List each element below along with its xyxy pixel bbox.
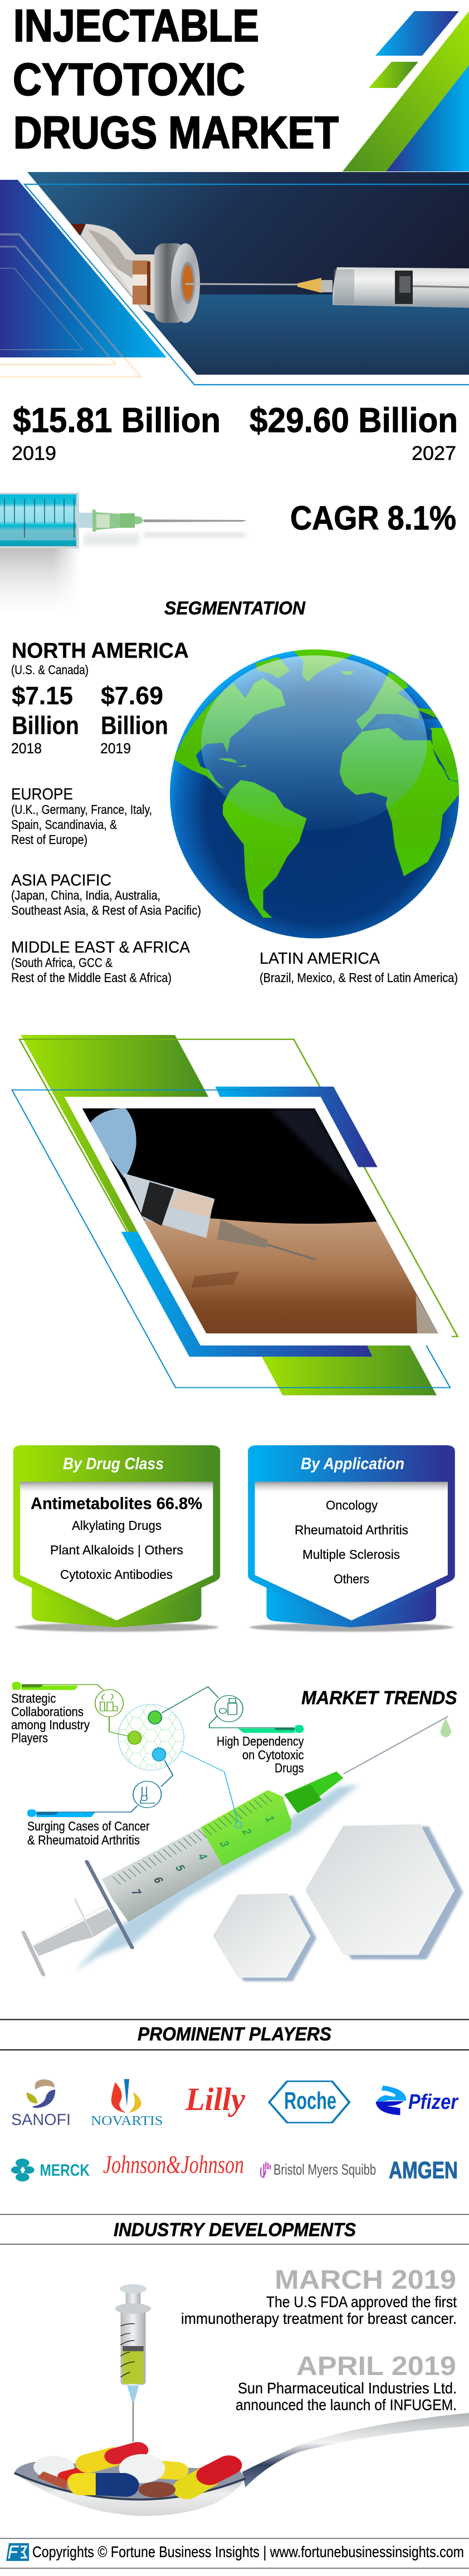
Middle East and Africa block: MIDDLE EAST & AFRICA (11, 939, 190, 956)
big syringe: 6 (150, 1876, 166, 1885)
big syringe: 4 (194, 1852, 210, 1861)
development: March 2019 (181, 2265, 457, 2327)
market value 2027 (250, 401, 458, 464)
market value 2019 (12, 401, 221, 464)
trend: surging cases: Surging Cases of Cancer (27, 1819, 150, 1833)
heading: market trends: MARKET TRENDS (301, 1687, 457, 1709)
Europe block: (U.K., Germany, France, Italy, (11, 802, 152, 817)
syringe (185, 267, 469, 308)
Asia Pacific block: (Japan, China, India, Australia, (11, 888, 160, 902)
logo mark: merck (11, 2158, 35, 2181)
icon: factory (95, 1690, 123, 1717)
icon: fortune business insights logo (6, 2543, 29, 2561)
Europe block: EUROPE (11, 786, 73, 803)
footer (0, 2539, 469, 2568)
trend: surging cases (27, 1819, 150, 1847)
Middle East and Africa block (11, 939, 190, 985)
tag: green (12, 1682, 79, 1690)
Asia Pacific block: ASIA PACIFIC (11, 872, 111, 890)
trend: surging cases: & Rheumatoid Arthritis (27, 1833, 140, 1847)
logo mark: roche hexagon (269, 2081, 349, 2123)
illustration: syringe over spoon of pills (14, 2284, 469, 2516)
vial (71, 224, 200, 323)
globe (168, 649, 467, 939)
panel: by drug class: Antimetabolites 66.8% (31, 1494, 202, 1513)
big syringe: 1 (262, 1814, 277, 1824)
trend: strategic collaborations (11, 1691, 90, 1745)
Middle East and Africa block: (South Africa, GCC & (11, 955, 113, 970)
panel: by application: Rheumatoid Arthritis (295, 1523, 408, 1537)
trend: strategic collaborations: Strategic (11, 1691, 56, 1706)
logo: pfizer: Pfizer (408, 2091, 459, 2114)
Asia Pacific block (11, 872, 201, 917)
logo mark: bristol hand (261, 2162, 270, 2178)
heading: prominent players: PROMINENT PLAYERS (138, 2024, 331, 2045)
hero illustration: vial and syringe (0, 172, 469, 385)
Asia Pacific block: Southeast Asia, & Rest of Asia Pacific) (11, 903, 201, 917)
market value 2027: $29.60 Billion (250, 401, 458, 440)
panel: by application (248, 1445, 455, 1632)
panel: by drug class (13, 1445, 220, 1632)
panel: by application: By Application (301, 1455, 404, 1473)
Latin America block (260, 950, 458, 985)
photo panel: injection (12, 1035, 458, 1395)
pills (33, 2450, 229, 2498)
North America block: (U.S. & Canada) (11, 663, 89, 677)
heading: industry developments: INDUSTRY DEVELOPMENTS (114, 2219, 356, 2240)
heading: segmentation: SEGMENTATION (164, 598, 306, 618)
North America block: 2019 (100, 740, 131, 757)
photo (81, 1108, 443, 1335)
title: DRUGS MARKET (13, 107, 339, 158)
Middle East and Africa block: Rest of the Middle East & Africa) (11, 970, 172, 985)
panel: by application: Multiple Sclerosis (302, 1547, 400, 1562)
market value 2027: 2027 (412, 443, 456, 464)
nodes (128, 1711, 165, 1761)
North America block: $7.69 (101, 681, 163, 710)
panel: by drug class: Cytotoxic Antibodies (60, 1567, 173, 1582)
panel: by drug class: Plant Alkaloids | Others (50, 1543, 183, 1557)
North America block (11, 639, 189, 757)
trend: high dependency: High Dependency (217, 1734, 304, 1748)
logo mark: novartis (111, 2079, 141, 2113)
North America block: Billion (12, 712, 79, 739)
North America block: 2018 (11, 740, 42, 757)
trend: strategic collaborations: Players (11, 1730, 48, 1745)
North America block: Billion (101, 712, 168, 739)
Europe block: Rest of Europe) (11, 832, 87, 847)
logo: lilly: Lilly (185, 2081, 245, 2117)
development: March 2019: MARCH 2019 (275, 2265, 456, 2295)
logo mark: pfizer (375, 2086, 406, 2115)
logo: novartis: NOVARTIS (91, 2114, 163, 2128)
development: April 2019: APRIL 2019 (296, 2352, 456, 2381)
panel: by application: Oncology (326, 1498, 378, 1512)
market value 2019: 2019 (12, 443, 56, 464)
development: April 2019 (236, 2352, 457, 2413)
big syringe: 2 (239, 1827, 255, 1836)
tag: cyan (27, 1809, 95, 1817)
panel: by drug class: By Drug Class (63, 1455, 164, 1473)
small syringe (115, 2284, 151, 2442)
icon: medicine (215, 1695, 243, 1722)
CAGR: CAGR 8.1% (290, 499, 456, 537)
logos (11, 2079, 406, 2181)
title (13, 1, 339, 158)
hexagons (213, 1824, 463, 1981)
title: CYTOTOXIC (13, 55, 245, 105)
big syringe (23, 1716, 451, 1975)
market trends illustration (12, 1682, 463, 1981)
icon: foot (133, 1781, 161, 1808)
decorative header shapes (343, 11, 469, 171)
logo mark: sanofi (26, 2079, 55, 2108)
icon: cyan syringe (0, 493, 247, 614)
market value 2019: $15.81 Billion (13, 401, 221, 440)
syringe shadow (75, 1784, 359, 1971)
trend: high dependency: Drugs (275, 1760, 304, 1775)
trend: high dependency (217, 1734, 304, 1775)
trend: strategic collaborations: Collaborations (11, 1705, 84, 1719)
Europe block (11, 786, 152, 847)
title: INJECTABLE (13, 1, 259, 51)
big syringe: 3 (216, 1839, 232, 1848)
logo: sanofi: SANOFI (11, 2111, 71, 2129)
big syringe: 7 (128, 1888, 144, 1897)
logo: merck: MERCK (40, 2161, 90, 2180)
spoon (14, 2413, 469, 2516)
North America block: $7.15 (12, 681, 73, 710)
trend: strategic collaborations: among Industry (11, 1718, 90, 1732)
Europe block: Spain, Scandinavia, & (11, 817, 117, 832)
trend: high dependency: on Cytotoxic (242, 1748, 304, 1762)
big syringe: 5 (172, 1864, 188, 1873)
logo: bristol myers squibb: Bristol Myers Squibb (273, 2161, 376, 2178)
connector lines (22, 1685, 129, 1736)
logo: johnson and johnson: Johnson&Johnson (103, 2150, 244, 2178)
network circle (118, 1704, 184, 1770)
tag: teal (238, 1725, 304, 1733)
panel: by application: Others (334, 1572, 369, 1586)
North America block: NORTH AMERICA (12, 639, 189, 663)
logo: roche: Roche (284, 2087, 336, 2114)
Latin America block: LATIN AMERICA (260, 950, 380, 968)
panel: by drug class: Alkylating Drugs (72, 1518, 162, 1533)
